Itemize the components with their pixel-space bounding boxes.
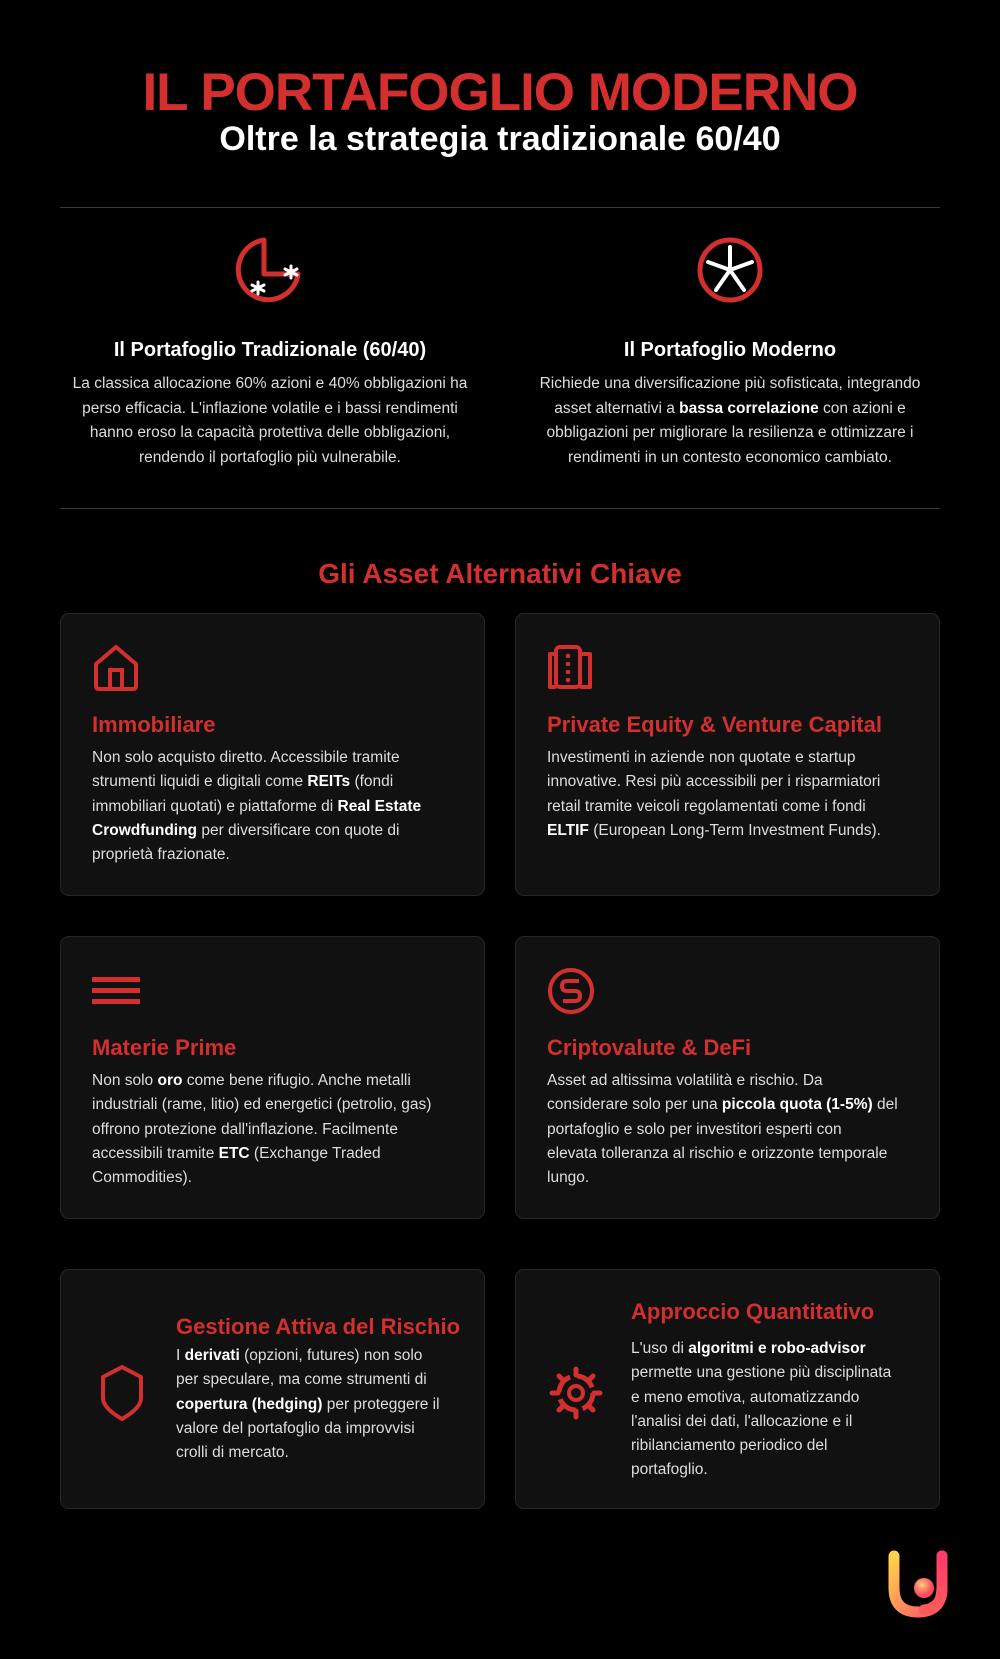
column: traditional portfolio: La classica allocazione 60% azioni e 40% obbligazioni ha xyxy=(73,375,467,392)
icon: shield xyxy=(101,1365,143,1421)
icon: diversified circle xyxy=(698,238,762,302)
column: modern portfolio xyxy=(540,238,920,466)
text: risk management xyxy=(176,1314,460,1461)
card: crypto xyxy=(515,936,940,1219)
card: commodities: Non solo oro come bene rifugio. Anche metalli xyxy=(92,1072,411,1089)
column: modern portfolio: rendimenti in un contesto economico cambiato. xyxy=(568,448,892,466)
icon: gear xyxy=(550,1366,602,1420)
card: private equity xyxy=(515,613,940,896)
card: crypto: portafoglio e solo per investitori esperti con xyxy=(547,1121,842,1138)
subtitle: Oltre la strategia tradizionale 60/40 xyxy=(219,120,781,158)
card: commodities: Materie Prime xyxy=(92,1035,236,1060)
card: real estate: proprietà frazionate. xyxy=(92,846,230,863)
text: quantitative: Approccio Quantitativo xyxy=(631,1299,874,1324)
icon: coin S xyxy=(548,968,594,1014)
card: real estate: Non solo acquisto diretto. Accessibile tramite xyxy=(92,749,400,766)
card: private equity: Investimenti in aziende non quotate e startup xyxy=(547,749,855,766)
section heading: Gli Asset Alternativi Chiave xyxy=(318,558,682,589)
card: crypto: Criptovalute & DeFi xyxy=(547,1035,751,1060)
card: commodities: accessibili tramite ETC (Exchange Traded xyxy=(92,1145,381,1162)
text: risk management: per speculare, ma come strumenti di xyxy=(176,1371,427,1388)
text: quantitative xyxy=(631,1299,892,1478)
icon: house xyxy=(94,644,138,691)
icon: stacked bars xyxy=(92,977,140,1004)
card: private equity: Private Equity & Venture Capital xyxy=(547,712,882,737)
column: traditional portfolio: hanno eroso la capacità protettiva delle obbligazioni, xyxy=(90,424,450,441)
card: commodities xyxy=(60,936,485,1219)
card: crypto: considerare solo per una piccola quota (1-5%) del xyxy=(547,1096,898,1113)
text: risk management: copertura (hedging) per proteggere il xyxy=(176,1396,440,1413)
text: quantitative: portafoglio. xyxy=(631,1461,708,1478)
text: quantitative: l'analisi dei dati, l'allocazione e il xyxy=(631,1413,852,1430)
column: modern portfolio: Il Portafoglio Moderno xyxy=(624,339,836,361)
column: modern portfolio: Richiede una diversificazione più sofisticata, integrando xyxy=(540,375,920,392)
card: commodities: offrono protezione dall'inflazione. Facilmente xyxy=(92,1121,398,1138)
text: risk management: valore del portafoglio da improvvisi xyxy=(176,1420,415,1437)
icon: pie chart xyxy=(236,238,300,302)
icon: buildings xyxy=(548,645,592,689)
column: traditional portfolio xyxy=(73,238,468,466)
card: crypto: Asset ad altissima volatilità e rischio. Da xyxy=(547,1072,823,1089)
card: real estate: strumenti liquidi e digitali come REITs (fondi xyxy=(92,773,393,790)
text: risk management: crolli di mercato. xyxy=(176,1444,289,1461)
column: traditional portfolio: perso efficacia. L'inflazione volatile e i bassi rendimenti xyxy=(82,400,458,416)
column: modern portfolio: obbligazioni per migliorare la resilienza e ottimizzare i xyxy=(546,424,914,441)
card: private equity: ELTIF (European Long-Term Investment Funds). xyxy=(547,822,881,839)
text: quantitative: ribilanciamento periodico del xyxy=(631,1437,827,1454)
card: real estate xyxy=(60,613,485,896)
text: quantitative: L'uso di algoritmi e robo-advisor xyxy=(631,1340,866,1357)
text: quantitative: permette una gestione più disciplinata xyxy=(631,1364,891,1381)
card: crypto: lungo. xyxy=(547,1169,589,1186)
card: private equity: retail tramite veicoli regolamentati come i fondi xyxy=(547,798,866,815)
title: IL PORTAFOGLIO MODERNO xyxy=(142,63,858,122)
column: modern portfolio: asset alternativi a bassa correlazione con azioni e xyxy=(554,400,906,416)
text: risk management: I derivati (opzioni, futures) non solo xyxy=(176,1347,422,1364)
card: real estate: Immobiliare xyxy=(92,712,215,737)
logo xyxy=(888,1550,948,1618)
text: quantitative: e meno emotiva, automatizzando xyxy=(631,1389,859,1406)
card: commodities: Commodities). xyxy=(92,1169,192,1186)
column: traditional portfolio: Il Portafoglio Tradizionale (60/40) xyxy=(114,339,426,361)
card: real estate: Crowdfunding per diversificare con quote di xyxy=(92,822,400,839)
card: commodities: industriali (rame, litio) ed energetici (petrolio, gas) xyxy=(92,1096,431,1113)
card: private equity: innovative. Resi più accessibili per i risparmiatori xyxy=(547,773,880,790)
card: quantitative approach xyxy=(515,1269,940,1509)
card: real estate: immobiliari quotati) e piattaforme di Real Estate xyxy=(92,798,421,815)
column: traditional portfolio: rendendo il portafoglio più vulnerabile. xyxy=(139,448,401,466)
card: crypto: elevata tolleranza al rischio e orizzonte temporale xyxy=(547,1145,887,1162)
text: risk management: Gestione Attiva del Rischio xyxy=(176,1314,460,1339)
card: risk management xyxy=(60,1269,485,1509)
